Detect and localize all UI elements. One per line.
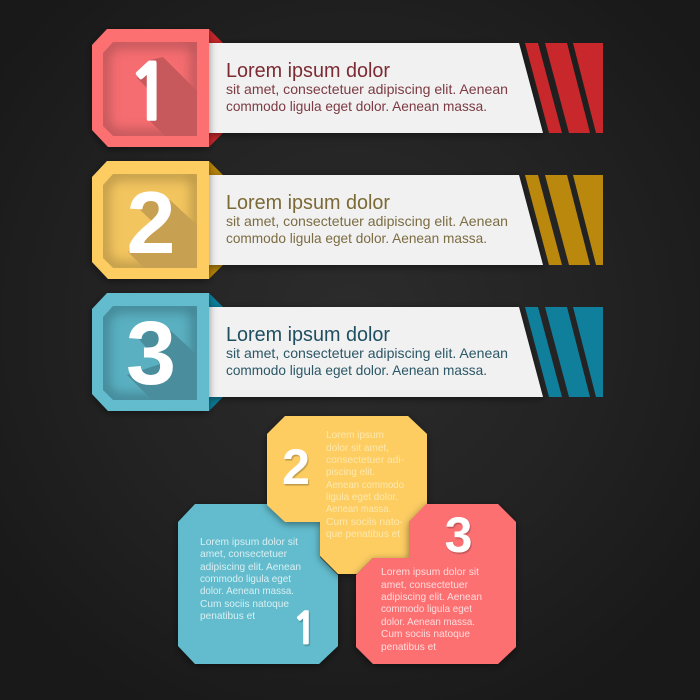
numeral 3: 3 xyxy=(445,507,472,563)
card text: amet, consectetuer xyxy=(200,548,287,560)
numeral 2: 2 xyxy=(282,439,310,495)
card text: piscing elit. xyxy=(326,466,375,478)
decorative slanted stripes xyxy=(525,307,603,397)
card text: Cum sociis natoque xyxy=(381,628,470,640)
card text: Lorem ipsum xyxy=(326,429,384,441)
panel: blue card 1 xyxy=(178,504,338,664)
card text: commodo ligula eget xyxy=(381,603,472,615)
numeral 3: 3 xyxy=(126,304,176,404)
panel: yellow card 2 xyxy=(267,416,427,574)
card text xyxy=(381,566,482,653)
banner text: Lorem ipsum dolor xyxy=(226,192,390,214)
card text: adipiscing elit. Aenean xyxy=(200,561,301,573)
number badge xyxy=(92,29,209,147)
numeral 1: 1 xyxy=(127,56,173,132)
card text: que penatibus et xyxy=(326,528,400,540)
card text: ligula eget dolor. xyxy=(326,491,398,503)
banner text: commodo ligula eget dolor. Aenean massa. xyxy=(226,98,487,114)
long shadow of number xyxy=(137,57,197,136)
card text: commodo ligula eget xyxy=(200,573,291,585)
banner fold triangles xyxy=(209,161,224,279)
card text: penatibus et xyxy=(200,610,255,622)
banner text: commodo ligula eget dolor. Aenean massa. xyxy=(226,230,487,246)
card text: dolor. Aenean massa. xyxy=(200,585,294,597)
card text: amet, consectetuer xyxy=(381,579,468,591)
card text: Lorem ipsum dolor sit xyxy=(381,566,479,578)
white text banner xyxy=(209,175,543,265)
card text xyxy=(326,429,404,540)
number badge xyxy=(92,293,209,411)
numeral 2: 2 xyxy=(127,173,175,272)
decorative slanted stripes xyxy=(525,175,603,265)
white text banner xyxy=(209,307,543,397)
banner text xyxy=(226,192,508,246)
card text: dolor sit amet, xyxy=(326,442,389,454)
panel: red card 3 xyxy=(356,504,516,664)
card text: Cum sociis natoque xyxy=(200,598,289,610)
numeral 1: 1 xyxy=(292,607,318,651)
card text: Aenean massa. xyxy=(326,503,391,515)
long shadow of number xyxy=(127,330,193,396)
card text: Aenean commodo xyxy=(326,479,404,491)
panel: row 1 xyxy=(92,29,603,147)
decorative slanted stripes xyxy=(525,43,603,133)
banner text xyxy=(226,60,508,114)
banner fold triangles xyxy=(209,293,224,411)
card text: Cum sociis nato- xyxy=(326,516,403,528)
long shadow of number xyxy=(128,200,194,265)
panel: row 2 xyxy=(92,161,603,279)
card text: adipiscing elit. Aenean xyxy=(381,591,482,603)
panel: row 3 xyxy=(92,293,603,411)
banner text: Lorem ipsum dolor xyxy=(226,60,390,82)
card text: dolor. Aenean massa. xyxy=(381,616,475,628)
banner fold triangles xyxy=(209,29,224,147)
banner text: sit amet, consectetuer adipiscing elit. Aenean xyxy=(226,213,508,229)
banner text: sit amet, consectetuer adipiscing elit. Aenean xyxy=(226,81,508,97)
banner text: sit amet, consectetuer adipiscing elit. Aenean xyxy=(226,345,508,361)
card text: penatibus et xyxy=(381,641,436,653)
card text: consectetuer adi- xyxy=(326,454,404,466)
number badge xyxy=(92,161,209,279)
white text banner xyxy=(209,43,543,133)
card text: Lorem ipsum dolor sit xyxy=(200,536,298,548)
banner text: Lorem ipsum dolor xyxy=(226,324,390,346)
banner text: commodo ligula eget dolor. Aenean massa. xyxy=(226,362,487,378)
card text xyxy=(200,536,301,622)
banner text xyxy=(226,324,508,378)
